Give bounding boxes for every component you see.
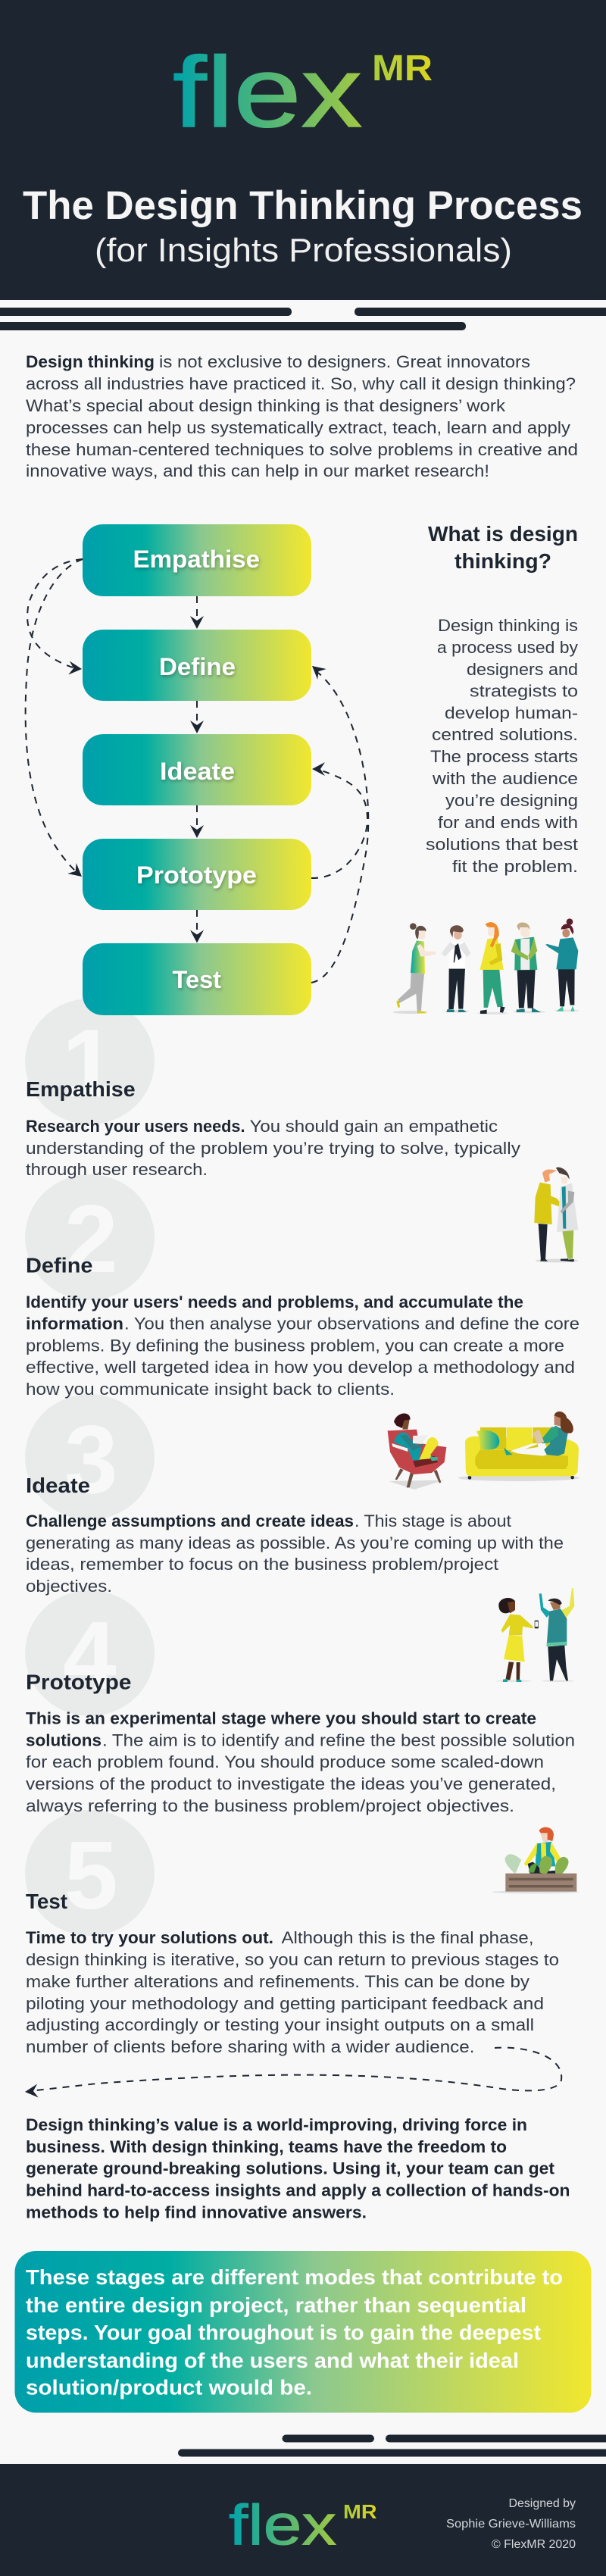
body text: through user research. bbox=[26, 1160, 208, 1179]
callout: solution/product would be. bbox=[26, 2376, 312, 2399]
designer credit: Sophie Grieve-Williams bbox=[446, 2518, 576, 2531]
intro text bbox=[26, 352, 578, 480]
what is design thinking text: The process starts bbox=[430, 747, 578, 766]
what is design thinking text: fit the problem. bbox=[452, 857, 578, 876]
arrow: Prototype to Test bbox=[190, 910, 204, 943]
body text bbox=[26, 1709, 575, 1815]
illustration: armchair and sofa readers bbox=[388, 1411, 579, 1490]
body text: piloting your methodology and getting participant feedback and bbox=[26, 1994, 544, 2013]
subtitle: (for Insights Professionals) bbox=[95, 232, 512, 269]
body text: . The aim is to identify and refine the best possible solution bbox=[102, 1730, 575, 1750]
designer credit: © FlexMR 2020 bbox=[492, 2538, 576, 2551]
body text: Challenge assumptions and create ideas bbox=[26, 1512, 354, 1530]
designer credit bbox=[446, 2497, 576, 2551]
body text: Identify your users' needs and problems, and accumulate the bbox=[26, 1293, 523, 1311]
body text: Time to try your solutions out. bbox=[26, 1928, 273, 1947]
footer panel bbox=[0, 2464, 606, 2576]
number circle 3 bbox=[25, 1394, 155, 1520]
what is design thinking text bbox=[426, 616, 578, 876]
body text: how you communicate insight back to clients. bbox=[26, 1380, 395, 1399]
logo: flexMR: flex bbox=[173, 36, 362, 148]
stage box: Ideate: Ideate bbox=[160, 758, 235, 785]
footer logo: MR bbox=[343, 2500, 377, 2523]
body text bbox=[26, 1512, 564, 1596]
heading: Define bbox=[26, 1253, 92, 1277]
section 2: Define bbox=[26, 1253, 579, 1399]
what is design thinking text: for and ends with bbox=[438, 813, 578, 832]
what is design thinking text: strategists to bbox=[470, 682, 578, 700]
arrow: Empathise back loop to Define bbox=[27, 559, 83, 676]
body text: always referring to the business problem/project objectives. bbox=[26, 1796, 514, 1815]
designer credit: Designed by bbox=[509, 2497, 576, 2510]
closing statement: business. With design thinking, teams have the freedom to bbox=[26, 2137, 507, 2156]
header panel bbox=[0, 0, 606, 300]
heading: Test bbox=[26, 1890, 67, 1913]
callout: steps. Your goal throughout is to gain the deepest bbox=[26, 2321, 541, 2344]
intro text: processes can help us systematically extract, teach, learn and apply bbox=[26, 418, 570, 437]
what is design thinking text: you’re designing bbox=[445, 791, 578, 810]
section 5: Test bbox=[26, 1890, 559, 2056]
closing statement bbox=[26, 2115, 570, 2221]
intro text: across all industries have practiced it. So, why call it design thinking? bbox=[26, 374, 576, 393]
footer logo bbox=[229, 2493, 377, 2556]
number circle 2: 2 bbox=[64, 1185, 118, 1293]
body text: ideas, remember to focus on the business problem/project bbox=[26, 1555, 498, 1574]
heading: Ideate bbox=[26, 1474, 90, 1497]
body text: information bbox=[26, 1314, 123, 1333]
number circle 4: 4 bbox=[63, 1602, 117, 1709]
what is design thinking heading: What is design bbox=[428, 522, 578, 546]
callout bbox=[15, 2251, 591, 2412]
arrow: Prototype loop to Ideate bbox=[311, 762, 367, 878]
arrow: Define to Ideate bbox=[190, 701, 204, 733]
body text: generating as many ideas as possible. As you’re coming up with the bbox=[26, 1533, 564, 1552]
arrow: Ideate to Prototype bbox=[190, 805, 204, 838]
stage box: Prototype: Prototype bbox=[136, 861, 257, 889]
illustration: two people talking bbox=[534, 1168, 578, 1262]
body text: for each problem found. You should produce some scaled-down bbox=[26, 1752, 544, 1771]
number circle 2 bbox=[25, 1174, 155, 1300]
stage box: Empathise: Empathise bbox=[133, 546, 260, 573]
number circle 3: 3 bbox=[64, 1405, 118, 1513]
closing statement: behind hard-to-access insights and apply a collection of hands-on bbox=[26, 2181, 570, 2200]
what is design thinking text: Design thinking is bbox=[438, 616, 578, 635]
body text: You should gain an empathetic bbox=[250, 1117, 498, 1136]
body text: make further alterations and refinements. This can be done by bbox=[26, 1972, 529, 1991]
body text: adjusting accordingly or testing your insight outputs on a small bbox=[26, 2015, 534, 2034]
logo: flexMR: MR bbox=[372, 48, 433, 89]
body text bbox=[26, 1293, 579, 1399]
arrow: Empathise to Define bbox=[190, 596, 204, 629]
intro text: What’s special about design thinking is that designers’ work bbox=[26, 396, 506, 415]
body text: effective, well targeted idea in how you develop a methodology and bbox=[26, 1358, 575, 1377]
stage box: Ideate bbox=[83, 734, 311, 805]
illustration: two people celebrating bbox=[496, 1588, 574, 1682]
intro text: these human-centered techniques to solve problems in creative and bbox=[26, 440, 578, 459]
what is design thinking text: a process used by bbox=[437, 638, 578, 657]
section 4: Prototype bbox=[26, 1670, 575, 1815]
number circle 1 bbox=[25, 999, 155, 1124]
what is design thinking text: designers and bbox=[467, 660, 578, 679]
body text: This is an experimental stage where you should start to create bbox=[26, 1709, 536, 1727]
number circle 5: 5 bbox=[64, 1821, 118, 1929]
stage box: Define bbox=[83, 630, 311, 701]
stage box: Prototype bbox=[83, 839, 311, 910]
body text: Research your users needs. bbox=[26, 1117, 245, 1136]
body text: number of clients before sharing with a wider audience. bbox=[26, 2037, 474, 2056]
closing statement: Design thinking’s value is a world-improving, driving force in bbox=[26, 2115, 527, 2134]
title: The Design Thinking Process bbox=[23, 183, 583, 228]
what is design thinking heading: thinking? bbox=[454, 549, 551, 573]
closing statement: methods to help find innovative answers. bbox=[26, 2203, 367, 2221]
body text: problems. By defining the business problem, you can create a more bbox=[26, 1336, 564, 1355]
what is design thinking text: develop human- bbox=[445, 703, 578, 723]
closing statement: generate ground-breaking solutions. Using it, your team can get bbox=[26, 2159, 555, 2177]
footer logo: flex bbox=[229, 2493, 336, 2556]
what is design thinking text: solutions that best bbox=[426, 835, 578, 854]
intro text: innovative ways, and this can help in our market research! bbox=[26, 461, 489, 480]
body text bbox=[26, 1928, 559, 2056]
arrow: Test loop to Define bbox=[308, 661, 368, 983]
number circle 4 bbox=[25, 1590, 155, 1716]
body text: . You then analyse your observations and define the core bbox=[124, 1314, 579, 1333]
body text: Although this is the final phase, bbox=[282, 1928, 533, 1947]
body text bbox=[26, 1117, 520, 1179]
body text: objectives. bbox=[26, 1577, 112, 1596]
illustration: group of five people bbox=[392, 918, 579, 1014]
stage box: Empathise bbox=[83, 524, 311, 596]
number circle 5 bbox=[25, 1810, 155, 1936]
body text: design thinking is iterative, so you can return to previous stages to bbox=[26, 1950, 559, 1969]
what is design thinking text: with the audience bbox=[432, 769, 578, 788]
body text: solutions bbox=[26, 1730, 102, 1750]
intro text: is not exclusive to designers. Great innovators bbox=[159, 352, 530, 371]
body text: versions of the product to investigate the ideas you’ve generated, bbox=[26, 1774, 556, 1793]
what is design thinking text: centred solutions. bbox=[432, 725, 578, 744]
heading: Prototype bbox=[26, 1670, 132, 1694]
intro text: Design thinking bbox=[26, 352, 155, 371]
body text: understanding of the problem you’re trying to solve, typically bbox=[26, 1139, 520, 1158]
callout: understanding of the users and what their ideal bbox=[26, 2349, 519, 2372]
logo: flexMR bbox=[173, 36, 433, 148]
arrow: dashed loop back to start bbox=[24, 2048, 561, 2099]
body text: . This stage is about bbox=[355, 1512, 511, 1530]
section 1: Empathise bbox=[26, 1077, 520, 1179]
section 3: Ideate bbox=[26, 1474, 564, 1596]
stage box: Test bbox=[83, 943, 311, 1015]
stage box: Test: Test bbox=[173, 966, 221, 993]
callout: These stages are different modes that contribute to bbox=[26, 2265, 563, 2289]
arrow: Empathise loop to Prototype bbox=[26, 559, 86, 882]
illustration: person gardening bbox=[492, 1827, 579, 1893]
flow diagram bbox=[26, 524, 368, 1015]
number circle 1: 1 bbox=[62, 1009, 116, 1117]
what is design thinking heading bbox=[428, 522, 578, 573]
heading: Empathise bbox=[26, 1077, 136, 1101]
callout: the entire design project, rather than sequential bbox=[26, 2293, 526, 2317]
stage box: Define: Define bbox=[159, 653, 236, 680]
